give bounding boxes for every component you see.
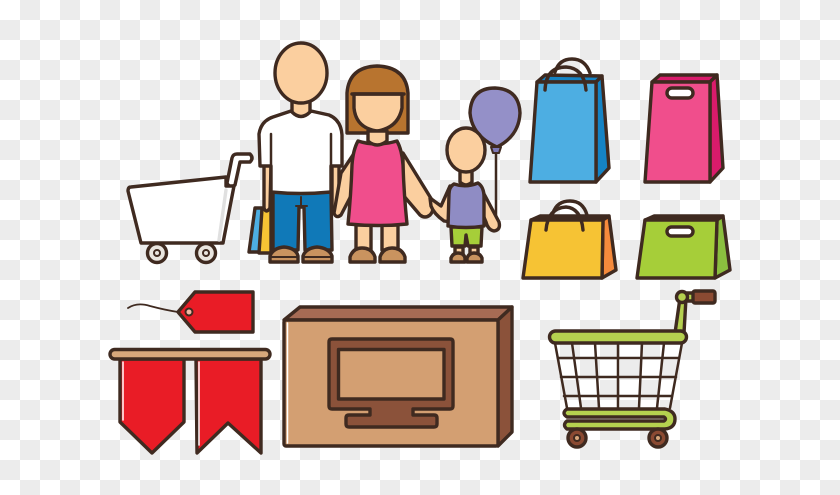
top rail <box>550 331 686 343</box>
bag handle slot <box>667 227 693 236</box>
child's head <box>447 128 485 172</box>
balloon <box>470 88 520 224</box>
mother's hair <box>347 66 408 133</box>
icon: blue shopping bag <box>530 59 609 182</box>
icon: green shopping cart <box>550 291 715 447</box>
icon: television box <box>284 307 512 446</box>
icon: price tag <box>128 292 253 332</box>
figure: child with balloon <box>430 88 520 262</box>
left pennant <box>120 359 184 453</box>
cart handle <box>675 291 715 333</box>
icon: green shopping bag <box>637 216 730 278</box>
banner rod <box>110 350 270 359</box>
father's head <box>275 43 327 103</box>
icon: pennant banner <box>110 350 270 453</box>
figure: father <box>249 43 342 262</box>
mother's dress <box>348 141 407 226</box>
father's shopping bags <box>249 208 271 253</box>
bag handle slot <box>667 88 693 98</box>
right pennant <box>196 359 261 453</box>
icon: pink shopping bag <box>645 75 723 182</box>
icon: white shopping cart <box>128 154 252 262</box>
wire basket <box>555 343 682 408</box>
icon: yellow shopping bag <box>523 201 616 278</box>
cart base <box>564 409 675 429</box>
monitor symbol <box>329 339 453 427</box>
wheels <box>568 429 586 447</box>
figure: mother <box>334 66 433 262</box>
